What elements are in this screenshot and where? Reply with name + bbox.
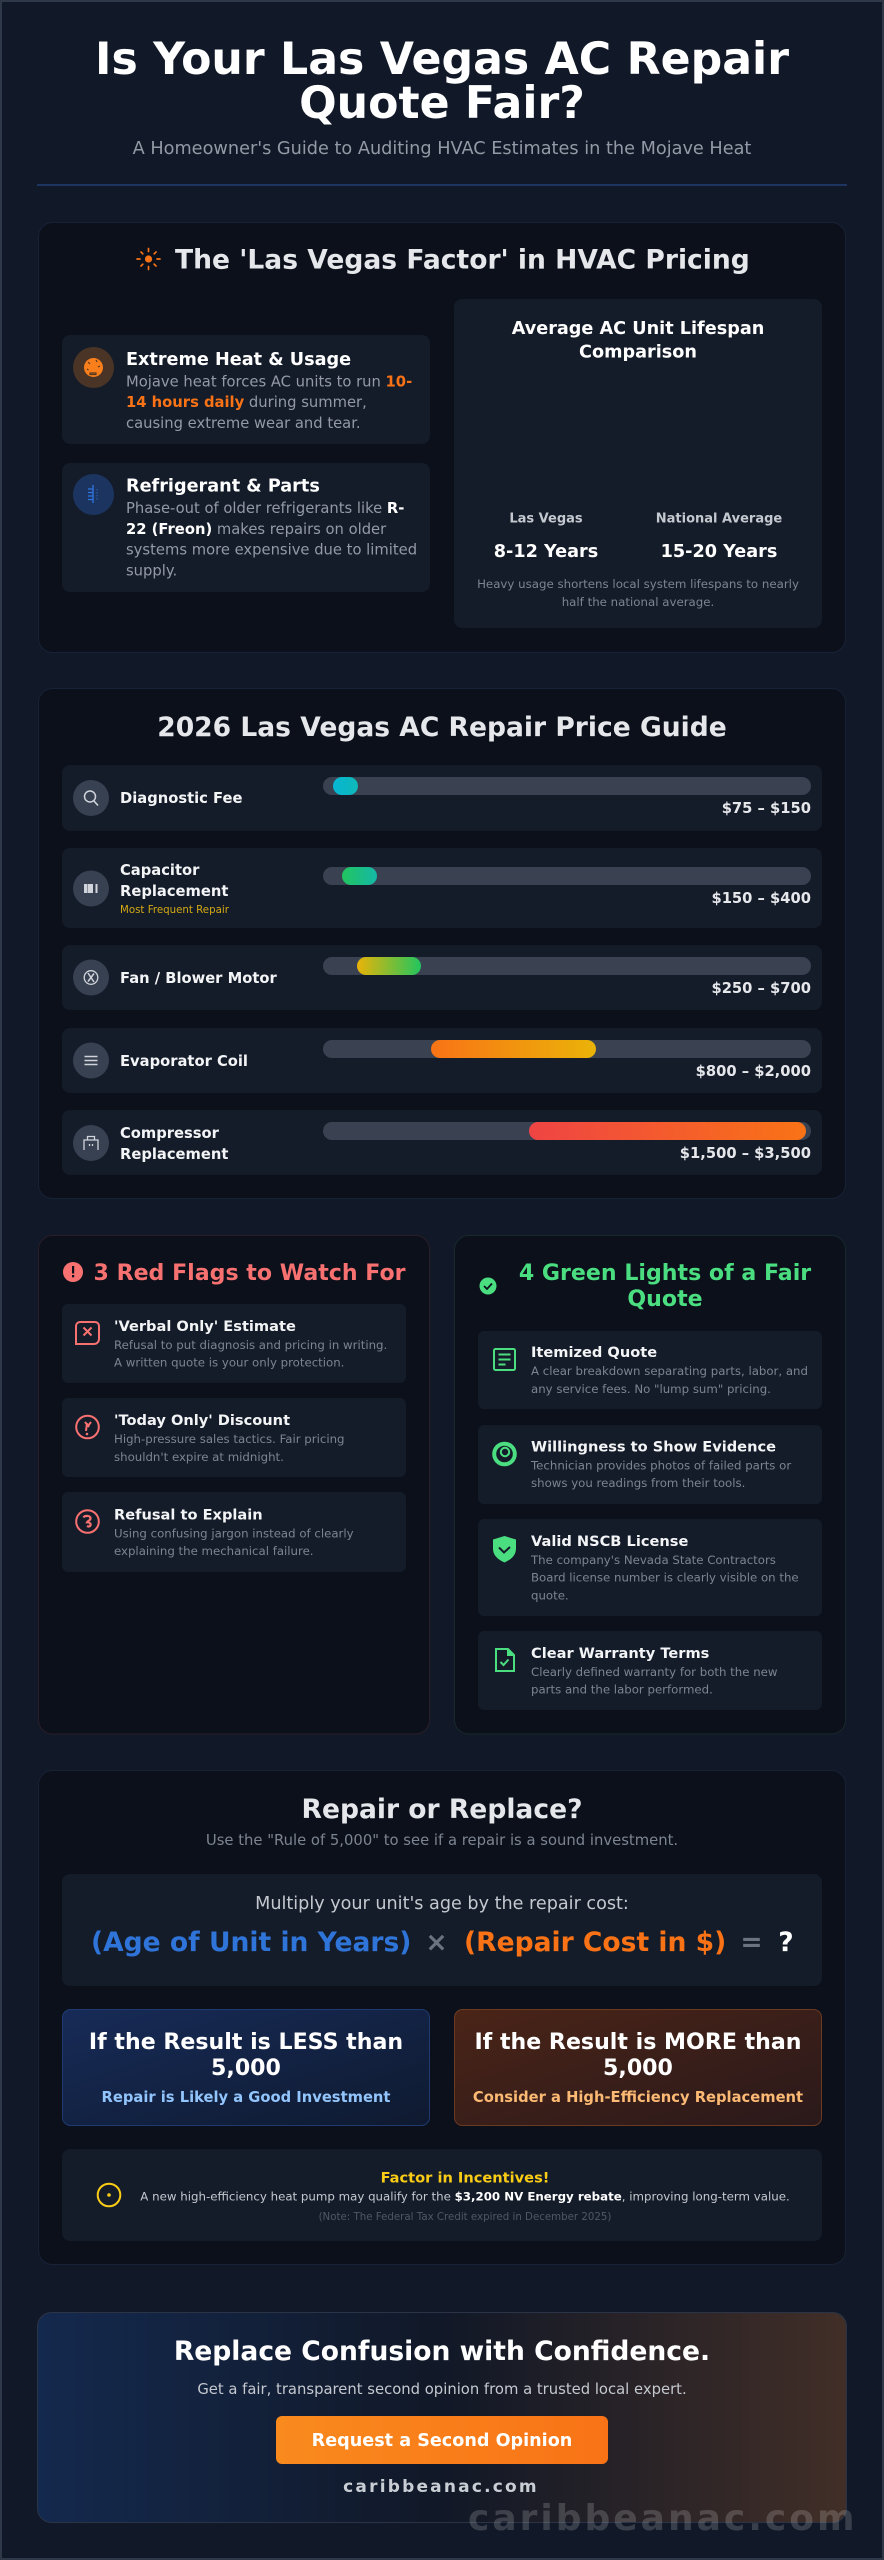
row: evaporator coil: $800 – $2,000	[696, 1063, 811, 1080]
card: license: The company's Nevada State Contractors	[531, 1553, 776, 1567]
subheading: Use the "Rule of 5,000" to see if a repair is a sound investment.	[206, 1832, 678, 1849]
chart title: Average AC Unit Lifespan	[512, 319, 764, 339]
card: warranty	[478, 1631, 822, 1710]
formula box: ×	[425, 1927, 448, 1958]
callout: incentives: (Note: The Federal Tax Credit expired in December 2025)	[319, 2211, 611, 2223]
card: itemized quote: any service fees. No "lump sum" pricing.	[531, 1382, 771, 1396]
card: evidence: shows you readings from their tools.	[531, 1476, 745, 1490]
formula box	[62, 1874, 822, 1986]
website: caribbeanac.com	[343, 2477, 539, 2497]
card: more than 5000: Consider a High-Efficiency Replacement	[473, 2089, 803, 2106]
stat: National Average: National Average	[656, 512, 782, 526]
icon: list	[494, 1349, 515, 1370]
row: capacitor: Most Frequent Repair	[120, 904, 230, 916]
row: compressor	[62, 1110, 822, 1175]
card: today only: 'Today Only' Discount	[114, 1412, 290, 1429]
card text: during summer,	[249, 394, 367, 411]
card: more than 5000	[454, 2010, 822, 2126]
icon: coil	[73, 1042, 109, 1078]
icon: target	[98, 2184, 120, 2206]
card: warranty: parts and the labor performed.	[531, 1683, 713, 1697]
note: half the national average.	[562, 595, 714, 609]
card: extreme heat	[62, 335, 430, 444]
row: evaporator coil: Evaporator Coil	[120, 1053, 248, 1070]
heading: 4 Green Lights of a Fair	[519, 1260, 811, 1286]
header	[37, 34, 847, 186]
card: license: Board license number is clearly visible on the	[531, 1571, 799, 1585]
card: less than 5000: 5,000	[211, 2055, 281, 2081]
icon: fan	[73, 960, 109, 996]
stat: Las Vegas	[494, 512, 598, 562]
card: less than 5000: If the Result is LESS than	[89, 2029, 403, 2055]
card: itemized quote: A clear breakdown separating parts, labor, and	[531, 1364, 808, 1378]
icon: check	[480, 1278, 496, 1294]
row: capacitor	[62, 848, 822, 928]
icon: heat	[73, 347, 114, 388]
row: compressor: Compressor	[120, 1125, 220, 1142]
row: capacitor: $150 – $400	[711, 890, 811, 907]
card: more than 5000: If the Result is MORE than	[474, 2029, 802, 2055]
card: itemized quote	[478, 1331, 822, 1409]
card: refusal to explain: Refusal to Explain	[114, 1506, 263, 1524]
stat: Las Vegas: Las Vegas	[509, 512, 583, 526]
note: Heavy usage shortens local system lifespans to nearly	[477, 577, 799, 591]
callout: incentives: A new high-efficiency heat pump may qualify for the $3,200 NV Energy rebate, improving long-term value.	[140, 2190, 790, 2204]
button: Request a Second Opinion	[312, 2431, 572, 2451]
row: compressor: Replacement	[120, 1146, 228, 1163]
title: Is Your Las Vegas AC Repair	[95, 34, 789, 85]
formula box: (Age of Unit in Years)	[91, 1927, 411, 1958]
formula box: ?	[778, 1927, 794, 1958]
card text: 14 hours daily	[126, 394, 245, 411]
card: refusal to explain	[62, 1492, 406, 1572]
card: refrigerant	[62, 463, 430, 592]
card text: causing extreme wear and tear.	[126, 415, 361, 432]
card: warranty: Clearly defined warranty for both the new	[531, 1665, 777, 1679]
card: refusal to explain: explaining the mechanical failure.	[114, 1544, 314, 1558]
card: evidence: Willingness to Show Evidence	[531, 1438, 776, 1455]
card title: Extreme Heat & Usage	[126, 350, 351, 370]
callout: incentives	[62, 2149, 822, 2241]
card: verbal only	[62, 1304, 406, 1383]
row: evaporator coil	[62, 1028, 822, 1093]
panel: price guide	[38, 688, 846, 1198]
card: today only: shouldn't expire at midnight.	[114, 1450, 284, 1464]
card text: supply.	[126, 562, 177, 579]
card: verbal only: A written quote is your only protection.	[114, 1356, 344, 1370]
icon: question	[76, 1510, 99, 1533]
watermark: caribbeanac.com	[468, 2498, 858, 2539]
panel: The Las Vegas Factor	[38, 222, 846, 652]
card text: systems more expensive due to limited	[126, 542, 417, 559]
stat: National Average: 15-20 Years	[661, 542, 777, 562]
row: diagnostic fee: $75 – $150	[722, 800, 811, 817]
title: Quote Fair?	[299, 78, 585, 129]
icon: x box	[76, 1322, 99, 1344]
stat: National Average	[656, 512, 782, 562]
card text: makes repairs on older	[217, 521, 386, 538]
icon: magnifier	[73, 780, 109, 816]
row: capacitor: Replacement	[120, 883, 228, 900]
heading: The 'Las Vegas Factor' in HVAC Pricing	[175, 244, 750, 276]
panel: green lights	[454, 1236, 846, 1734]
card text: Mojave heat forces AC units to run 10-	[126, 374, 412, 390]
row: fan motor: $250 – $700	[711, 980, 811, 997]
icon: shield	[493, 1536, 516, 1562]
row: capacitor: Capacitor	[120, 862, 200, 879]
icon: compressor	[73, 1125, 109, 1161]
row: fan motor	[62, 945, 822, 1010]
icon: sun	[137, 248, 160, 270]
button	[276, 2416, 608, 2464]
card: today only	[62, 1398, 406, 1477]
heading: 3 Red Flags to Watch For	[94, 1260, 406, 1286]
card: license	[478, 1519, 822, 1616]
stat: Las Vegas: 8-12 Years	[494, 542, 598, 562]
subheading: Get a fair, transparent second opinion from a trusted local expert.	[197, 2381, 687, 2398]
card: warranty: Clear Warranty Terms	[531, 1645, 709, 1662]
card: verbal only: 'Verbal Only' Estimate	[114, 1318, 296, 1335]
card: evidence	[478, 1425, 822, 1504]
panel: red flags	[38, 1236, 430, 1734]
panel: repair or replace	[38, 1770, 846, 2264]
panel: call to action	[38, 2312, 846, 2522]
card title: Refrigerant & Parts	[126, 477, 320, 497]
icon: camera lens	[494, 1444, 515, 1464]
row: fan motor: Fan / Blower Motor	[120, 970, 277, 987]
card: lifespan comparison	[454, 299, 822, 628]
chart title: Comparison	[579, 342, 697, 362]
card: refusal to explain: Using confusing jargon instead of clearly	[114, 1526, 354, 1540]
formula box: (Repair Cost in $)	[464, 1927, 726, 1958]
icon: refrigerant	[73, 474, 114, 515]
card text: Phase-out of older refrigerants like R-	[126, 500, 404, 517]
icon: clock alert	[76, 1416, 99, 1438]
card: more than 5000: 5,000	[603, 2055, 673, 2081]
card: less than 5000	[62, 2010, 430, 2126]
card: license: Valid NSCB License	[531, 1533, 688, 1550]
card: less than 5000: Repair is Likely a Good Investment	[102, 2089, 390, 2106]
row: diagnostic fee: Diagnostic Fee	[120, 790, 242, 807]
heading: Replace Confusion with Confidence.	[174, 2336, 710, 2367]
row: diagnostic fee	[62, 765, 822, 831]
callout: incentives: Factor in Incentives!	[381, 2170, 549, 2186]
subtitle: A Homeowner's Guide to Auditing HVAC Estimates in the Mojave Heat	[133, 139, 751, 159]
card: license: quote.	[531, 1588, 569, 1602]
formula box: =	[740, 1927, 763, 1958]
heading: 2026 Las Vegas AC Repair Price Guide	[157, 712, 727, 743]
icon: alert	[63, 1262, 83, 1282]
card: today only: High-pressure sales tactics. Fair pricing	[114, 1432, 344, 1446]
formula box: Multiply your unit's age by the repair cost:	[255, 1894, 629, 1914]
icon: capacitor	[73, 870, 109, 906]
icon: document check	[496, 1649, 514, 1671]
card: itemized quote: Itemized Quote	[531, 1344, 657, 1361]
card text: 22 (Freon)	[126, 521, 212, 538]
card: evidence: Technician provides photos of failed parts or	[531, 1458, 791, 1472]
heading: Quote	[627, 1286, 703, 1312]
card: verbal only: Refusal to put diagnosis and pricing in writing.	[114, 1338, 387, 1352]
row: compressor: $1,500 – $3,500	[680, 1145, 811, 1162]
heading: Repair or Replace?	[302, 1794, 582, 1825]
